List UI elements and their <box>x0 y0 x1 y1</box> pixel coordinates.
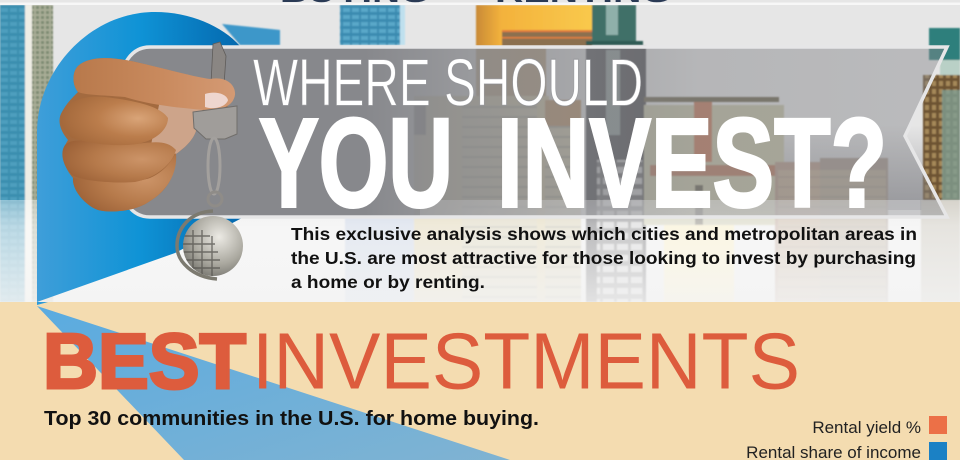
section heading <box>43 316 800 406</box>
building: small blue roof <box>222 24 280 45</box>
banner lower highlight <box>420 200 920 216</box>
ring finger <box>62 140 176 183</box>
index finger <box>60 97 168 145</box>
top section title clipped <box>280 0 672 9</box>
section subheading: Top 30 communities in the U.S. for home buying. <box>44 407 539 430</box>
title <box>253 46 887 234</box>
building: orange tower <box>476 5 592 96</box>
key ring <box>208 138 220 194</box>
swoosh tip <box>37 302 48 305</box>
building: dark teal tower <box>586 5 646 302</box>
banner <box>115 47 947 217</box>
darker sky behind banner <box>640 125 925 210</box>
beige section background <box>0 302 960 460</box>
title line 2 <box>259 92 887 234</box>
legend <box>746 416 947 460</box>
lower fade over skyline <box>0 200 960 302</box>
fingernail <box>205 93 228 108</box>
legend swatch: rental yield <box>929 416 947 434</box>
legend label: rental yield: Rental yield % <box>812 418 921 437</box>
globe grid <box>183 230 220 276</box>
thumb <box>74 58 235 110</box>
globe stand <box>177 211 217 279</box>
hand silhouette <box>60 58 235 211</box>
icon: hand holding key <box>60 42 243 280</box>
little finger <box>73 153 176 211</box>
intro text: a home or by renting. <box>291 272 485 292</box>
building: peach towers <box>775 158 888 302</box>
intro text <box>291 224 917 292</box>
top strip <box>0 2 960 5</box>
building: right tower <box>921 28 960 302</box>
key blade <box>211 42 226 85</box>
legend swatch: rental share <box>929 442 947 460</box>
blue swoosh <box>37 12 242 302</box>
title line 1: WHERE SHOULD <box>253 46 643 120</box>
blue light beam <box>37 306 510 460</box>
building: tan center block <box>414 96 581 302</box>
palm <box>150 100 205 154</box>
city skyline <box>0 5 960 302</box>
building: pale tower with salmon stripes <box>644 97 784 302</box>
hero background <box>0 0 960 302</box>
heading light word: INVESTMENTS <box>252 316 800 406</box>
intro text: This exclusive analysis shows which cities and metropolitan areas in <box>291 224 917 244</box>
building: left glass tower <box>0 5 53 302</box>
title line 2: YOU <box>259 92 453 234</box>
intro text: the U.S. are most attractive for those looking to invest by purchasing <box>291 248 916 268</box>
globe <box>183 216 243 276</box>
chain link <box>208 192 222 206</box>
heading bold word: BEST <box>43 317 246 405</box>
building: blue tower <box>340 5 415 302</box>
key head <box>193 106 237 139</box>
